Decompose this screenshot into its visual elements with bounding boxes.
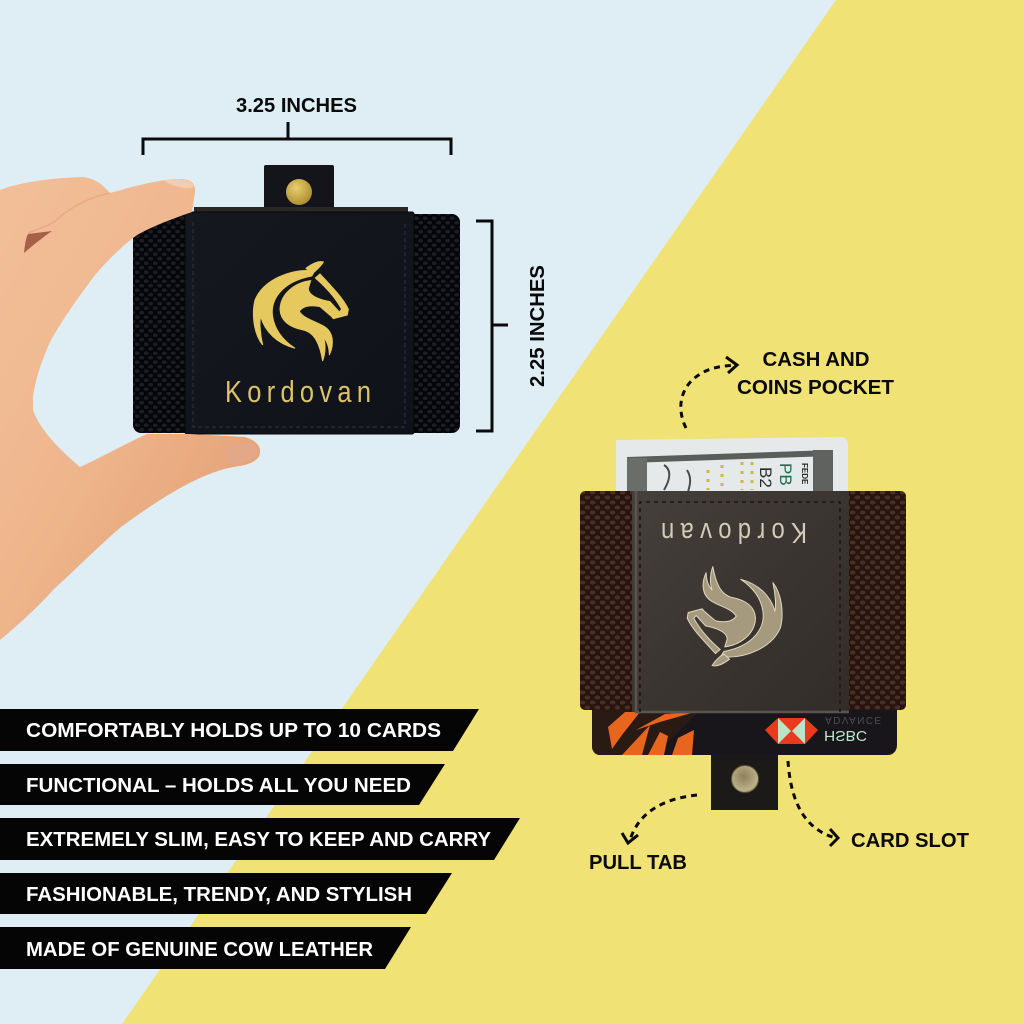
inner back edge [194,207,408,217]
finger gap shadow [24,231,52,253]
stitching [640,502,840,712]
dimension: height label: 2.25 INCHES [527,265,549,387]
finger boundary [28,193,110,233]
gold horse logo [253,262,348,361]
bill engraving border [627,450,832,463]
bill script [664,465,690,492]
label: cash and coins pocket [737,349,894,399]
card left art dark [592,710,700,755]
bill FEDERAL text: FEDE [800,463,809,485]
dashed arrow: cash and coins pocket [681,357,737,428]
pull tab [711,755,778,810]
dimension: width label: 3.25 INCHES [236,95,357,117]
feature banner 3 [0,818,520,860]
black wallet [133,165,460,434]
elastic band [133,214,460,433]
brown wallet [580,437,906,810]
dimension: width bracket [143,122,451,155]
label: pull tab: PULL TAB [589,852,687,874]
label: cash and coins pocket: COINS POCKET [737,377,894,399]
leather edge highlights [636,491,849,712]
elastic band [580,491,906,710]
brass snap [286,179,312,205]
feature banner 1: COMFORTABLY HOLDS UP TO 10 CARDS [26,719,441,742]
credit card [592,705,897,755]
HSBC text: HSBC [824,727,867,744]
cash bill [616,437,848,494]
horse logo upside-down [687,567,782,666]
leather front [632,491,849,712]
index finger nail [164,179,194,188]
gold brand name: Kordovan [225,375,371,410]
dashed arrow: card slot [788,761,838,846]
feature banner 5 [0,927,411,969]
feature banner 5: MADE OF GENUINE COW LEATHER [26,938,373,961]
dashed arrow: pull tab [622,795,697,843]
hand silhouette [0,177,260,640]
feature banner 2 [0,764,445,805]
pull tab [264,165,334,215]
label: cash and coins pocket: CASH AND [762,349,870,371]
HSBC hexagon [765,718,818,744]
card orange shards [608,712,695,755]
snap [732,766,758,792]
bill corner numeral left [627,458,647,492]
hand holding wallet [0,177,260,640]
brand name upside-down: Kordovan [661,516,807,549]
leather front [185,212,414,434]
bill yellow dots [708,462,752,490]
HSBC hexagon inner [778,718,805,744]
feature banner 1 [0,709,479,751]
label: card slot: CARD SLOT [851,830,969,852]
feature banner 3: EXTREMELY SLIM, EASY TO KEEP AND CARRY [26,828,491,851]
dimension: height bracket [476,221,508,431]
feature banner 4: FASHIONABLE, TRENDY, AND STYLISH [26,883,412,906]
thumb nail [225,443,259,465]
bill serial text B2: B2 [756,467,775,488]
advance text: ADVANCE [825,714,881,725]
feature banner 2: FUNCTIONAL – HOLDS ALL YOU NEED [26,774,411,797]
stitching [193,222,405,427]
bill serial text PB: PB [776,463,795,486]
feature banner 4 [0,873,452,914]
bill corner numeral right [813,450,833,492]
